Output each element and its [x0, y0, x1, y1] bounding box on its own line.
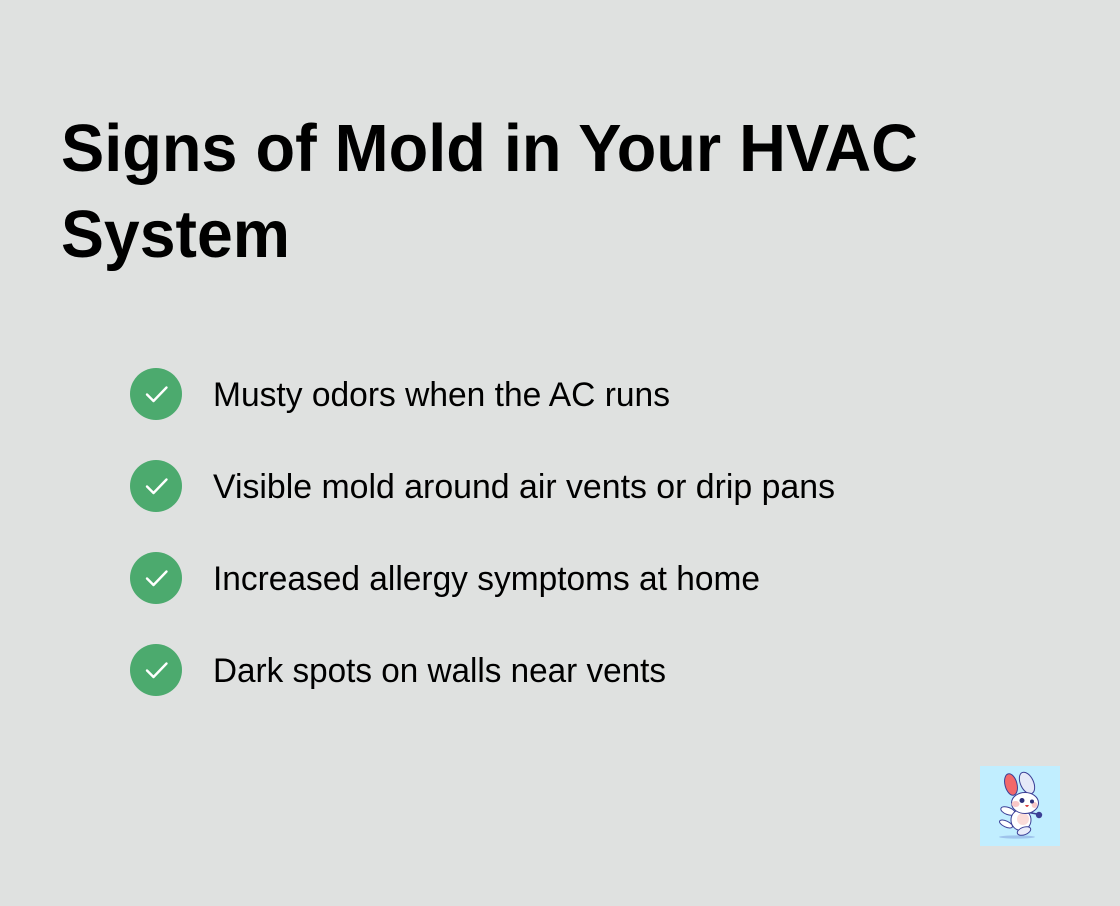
title	[61, 111, 918, 272]
title: System	[61, 197, 290, 272]
item: dark spots: Dark spots on walls near vents	[213, 652, 666, 690]
item: allergy symptoms	[130, 552, 760, 604]
body	[1011, 810, 1031, 830]
right ear	[1016, 770, 1038, 796]
arm right	[1036, 812, 1042, 818]
item: visible mold: Visible mold around air vents or drip pans	[213, 468, 835, 506]
title: Signs of Mold in Your HVAC	[61, 111, 918, 186]
item: dark spots	[130, 644, 666, 696]
checklist	[130, 368, 835, 696]
leg right	[1016, 825, 1032, 837]
item: musty odors	[130, 368, 670, 420]
leg left	[998, 818, 1014, 830]
left ear	[1002, 772, 1020, 797]
head	[1012, 792, 1038, 814]
icon: rabbit logo	[980, 766, 1060, 846]
item: visible mold	[130, 460, 835, 512]
arm left	[1000, 805, 1016, 817]
item: allergy symptoms: Increased allergy symptoms at home	[213, 560, 760, 598]
item: musty odors: Musty odors when the AC runs	[213, 376, 670, 414]
